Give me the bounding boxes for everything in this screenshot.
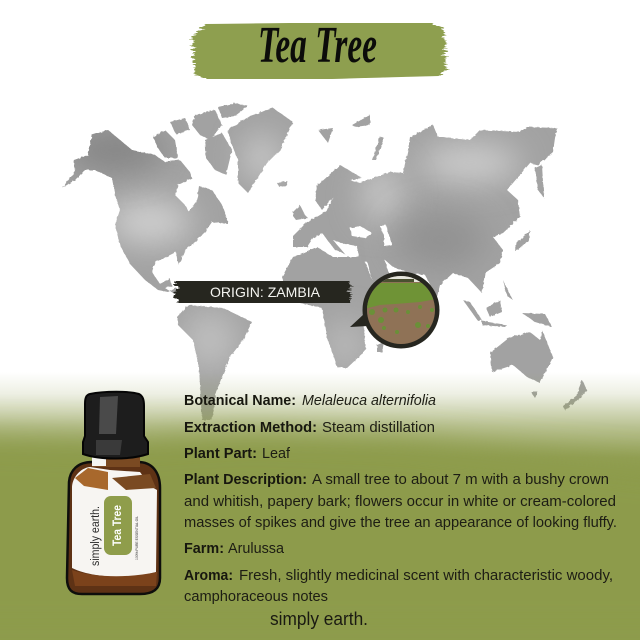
aroma: camphoraceous notes <box>184 588 328 605</box>
green label panel <box>104 496 132 555</box>
bottle neck <box>92 456 140 467</box>
origin label: ORIGIN: ZAMBIA <box>210 284 321 300</box>
plant part: Leaf <box>262 445 291 462</box>
origin banner <box>176 281 350 303</box>
plant part: Plant Part: <box>184 445 257 462</box>
aroma: Aroma: <box>184 567 233 584</box>
plant description: A small tree to about 7 m with a bushy crown <box>312 471 609 488</box>
extraction method: Extraction Method: <box>184 419 317 436</box>
brand logo: simply earth. <box>270 609 368 629</box>
bottle small print: 100% PURE ESSENTIAL OIL <box>134 515 139 560</box>
world map <box>62 102 588 420</box>
bottle glass <box>67 462 160 594</box>
plant description <box>184 471 617 531</box>
green ground wash <box>0 372 640 640</box>
bottle white label <box>72 467 157 577</box>
plant description: Plant Description: <box>184 471 307 488</box>
bottle icon <box>67 392 160 594</box>
extraction method: Steam distillation <box>322 419 435 436</box>
bottle brand: simply earth. <box>90 506 102 566</box>
botanical name <box>184 392 436 409</box>
facts text block <box>184 392 617 605</box>
bottle name: Tea Tree <box>110 505 124 546</box>
farm: Farm: <box>184 540 224 557</box>
title: Tea Tree <box>258 17 377 74</box>
extraction method <box>184 419 435 436</box>
plant description: and whitish, papery bark; flowers occur in white or cream-colored <box>184 493 616 510</box>
aroma <box>184 567 613 605</box>
farm <box>184 540 285 557</box>
farm: Arulussa <box>228 540 285 557</box>
bottle cap <box>83 392 148 458</box>
title brush stroke <box>192 17 446 79</box>
botanical name: Melaleuca alternifolia <box>302 392 436 409</box>
aroma: Fresh, slightly medicinal scent with characteristic woody, <box>239 567 613 584</box>
botanical name: Botanical Name: <box>184 392 296 409</box>
origin photo callout <box>350 270 444 350</box>
plant description: masses of spikes and give the tree an appearance of looking fluffy. <box>184 514 617 531</box>
